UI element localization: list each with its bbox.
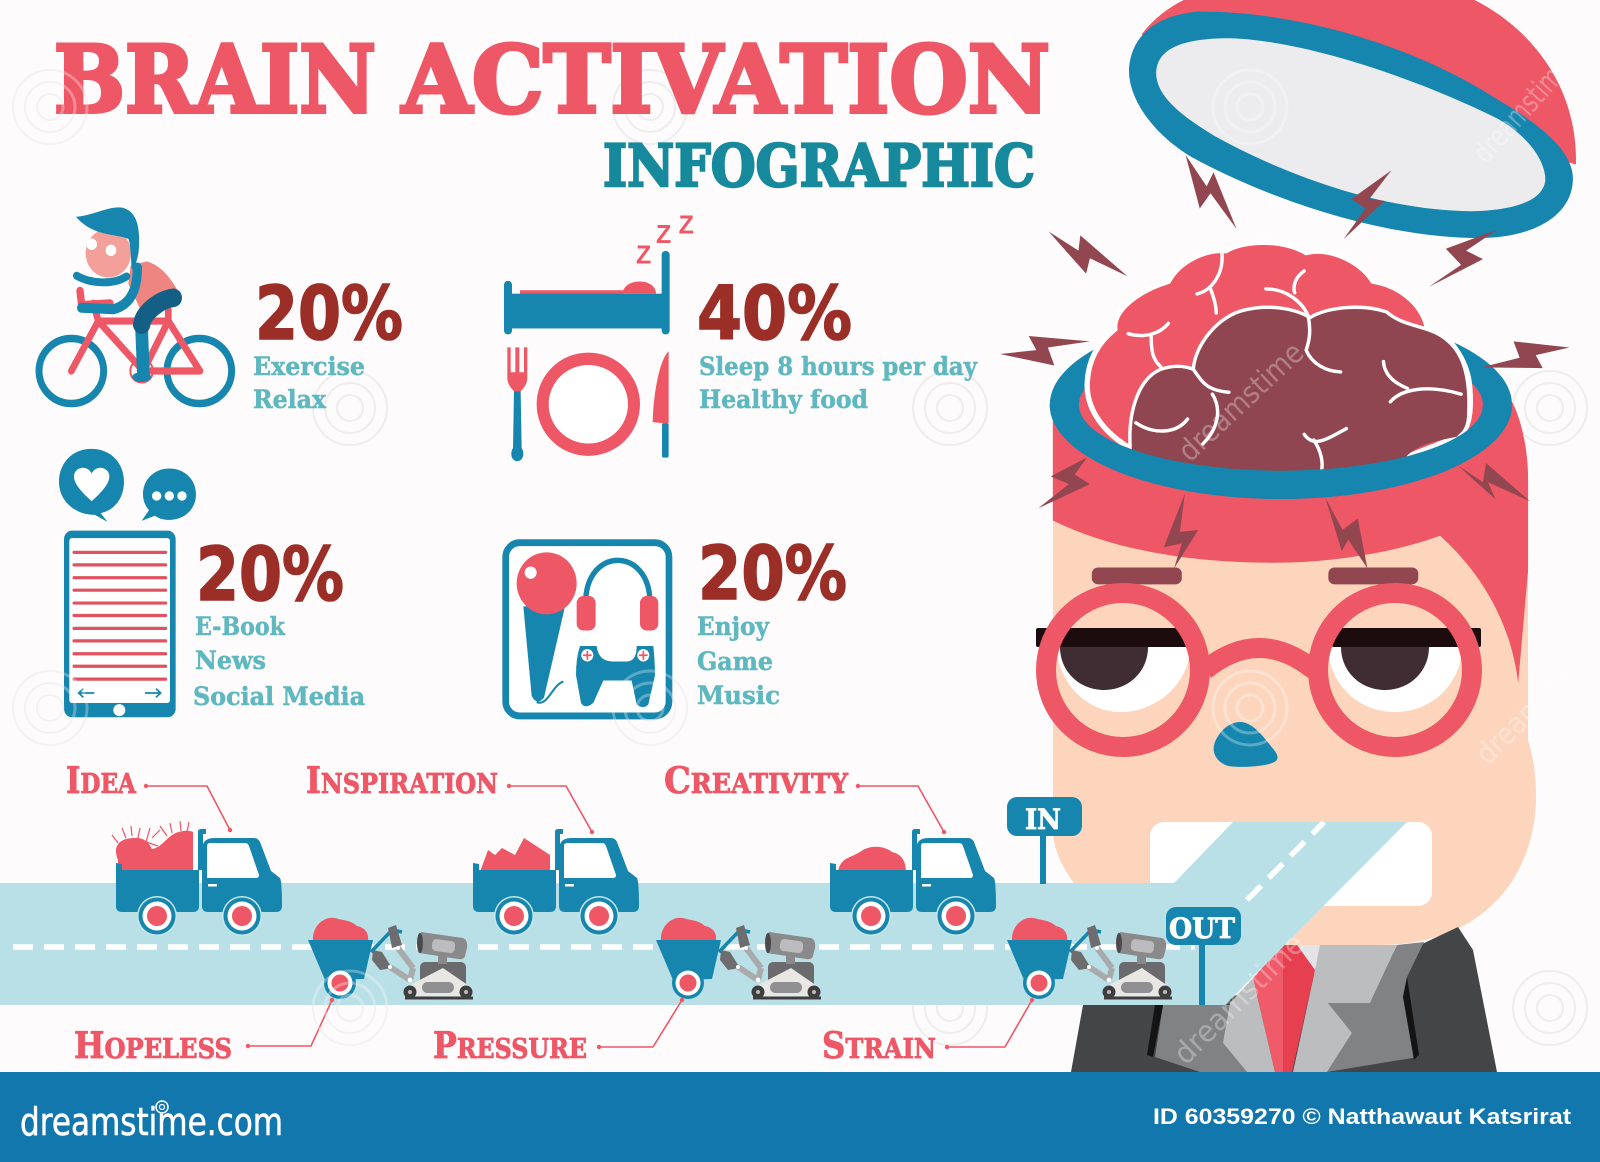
- percentage: 20%: [255, 271, 403, 357]
- label: creativity: [664, 760, 946, 834]
- glasses: [1046, 593, 1472, 747]
- text block: Healthy food: [699, 385, 868, 414]
- text block: E-Book: [195, 612, 286, 641]
- title: BRAIN: [54, 25, 376, 134]
- subtitle: INFOGRAPHIC: [603, 132, 1035, 200]
- eyes: [1036, 628, 1481, 712]
- road centre line: [13, 944, 1195, 950]
- label: idea: [66, 760, 232, 832]
- label: hopeless: HOPELESS: [74, 1025, 232, 1067]
- character: head with open skull: [1000, 0, 1576, 1072]
- label: hopeless: [74, 998, 334, 1067]
- face: [1053, 500, 1536, 945]
- label: idea: IDEA: [66, 760, 137, 802]
- sign: in: [1007, 797, 1082, 884]
- lid: [1129, 0, 1576, 238]
- text block: [253, 352, 365, 414]
- text block: Music: [697, 681, 780, 710]
- suit: [1071, 927, 1497, 1072]
- panel: exercise: [39, 207, 403, 414]
- text block: Social Media: [193, 682, 365, 711]
- eyebrows: [1092, 568, 1418, 584]
- percentage: 20%: [698, 531, 847, 617]
- title: [54, 25, 1050, 134]
- label: creativity: CREATIVITY: [664, 760, 849, 802]
- sign: in: IN: [1025, 803, 1061, 836]
- mouth: [1150, 822, 1432, 906]
- truck: inspiration: [473, 829, 639, 936]
- text block: Enjoy: [697, 612, 770, 641]
- nose: [1214, 722, 1278, 767]
- label: pressure: [433, 998, 684, 1067]
- percentage: 40%: [697, 271, 852, 357]
- sign: out: [1166, 907, 1241, 1005]
- text block: [699, 352, 978, 414]
- text block: Game: [697, 647, 773, 676]
- label: strain: STRAIN: [822, 1025, 936, 1067]
- text block: Sleep 8 hours per day: [699, 352, 978, 381]
- text block: News: [195, 646, 266, 675]
- road: [0, 822, 1407, 1005]
- icon: tablet with bubbles: [59, 449, 196, 717]
- text block: Exercise: [253, 352, 365, 381]
- label: inspiration: INSPIRATION: [306, 760, 498, 802]
- text: dreamstime: [1172, 335, 1311, 469]
- head ring front: [1050, 405, 1512, 499]
- panel: sleep and food: [504, 211, 978, 461]
- icon: bed and dining: Z: [636, 241, 651, 270]
- text block: [193, 612, 365, 711]
- panel: entertainment: [506, 531, 847, 716]
- label: pressure: PRESSURE: [433, 1025, 587, 1067]
- panel: reading: [59, 449, 365, 717]
- hair: [1053, 402, 1528, 683]
- cart and robot: pressure: [656, 918, 821, 1000]
- cart and robot: strain: [1007, 918, 1172, 1000]
- footer credit: ID 60359270 © Natthawaut Katsrirat: [1153, 1104, 1572, 1129]
- label: strain: [822, 998, 1034, 1067]
- text: dreamstime: [1167, 927, 1312, 1072]
- title: ACTIVATION: [401, 25, 1050, 134]
- truck: idea: [112, 821, 282, 936]
- text block: [697, 612, 780, 710]
- cart and robot: hopeless: [308, 918, 473, 1000]
- hair, brain and lid: [1000, 0, 1576, 683]
- brain: [1087, 242, 1470, 478]
- percentage: 20%: [196, 532, 344, 618]
- sign: out: OUT: [1169, 912, 1235, 945]
- text block: Relax: [253, 385, 327, 414]
- lightning bolts: [1000, 155, 1569, 568]
- icon: bed and dining: Z: [679, 211, 694, 240]
- icon: bed and dining: [504, 211, 694, 461]
- label: inspiration: [306, 760, 594, 834]
- icon: bed and dining: Z: [656, 221, 671, 249]
- footer bar: [0, 1072, 1600, 1162]
- head ring back: [1050, 311, 1512, 499]
- footer logo: dreamstime.com: [20, 1100, 283, 1144]
- truck: creativity: [830, 829, 996, 936]
- icon: cyclist: [39, 207, 232, 403]
- icon: music and games: [506, 543, 669, 716]
